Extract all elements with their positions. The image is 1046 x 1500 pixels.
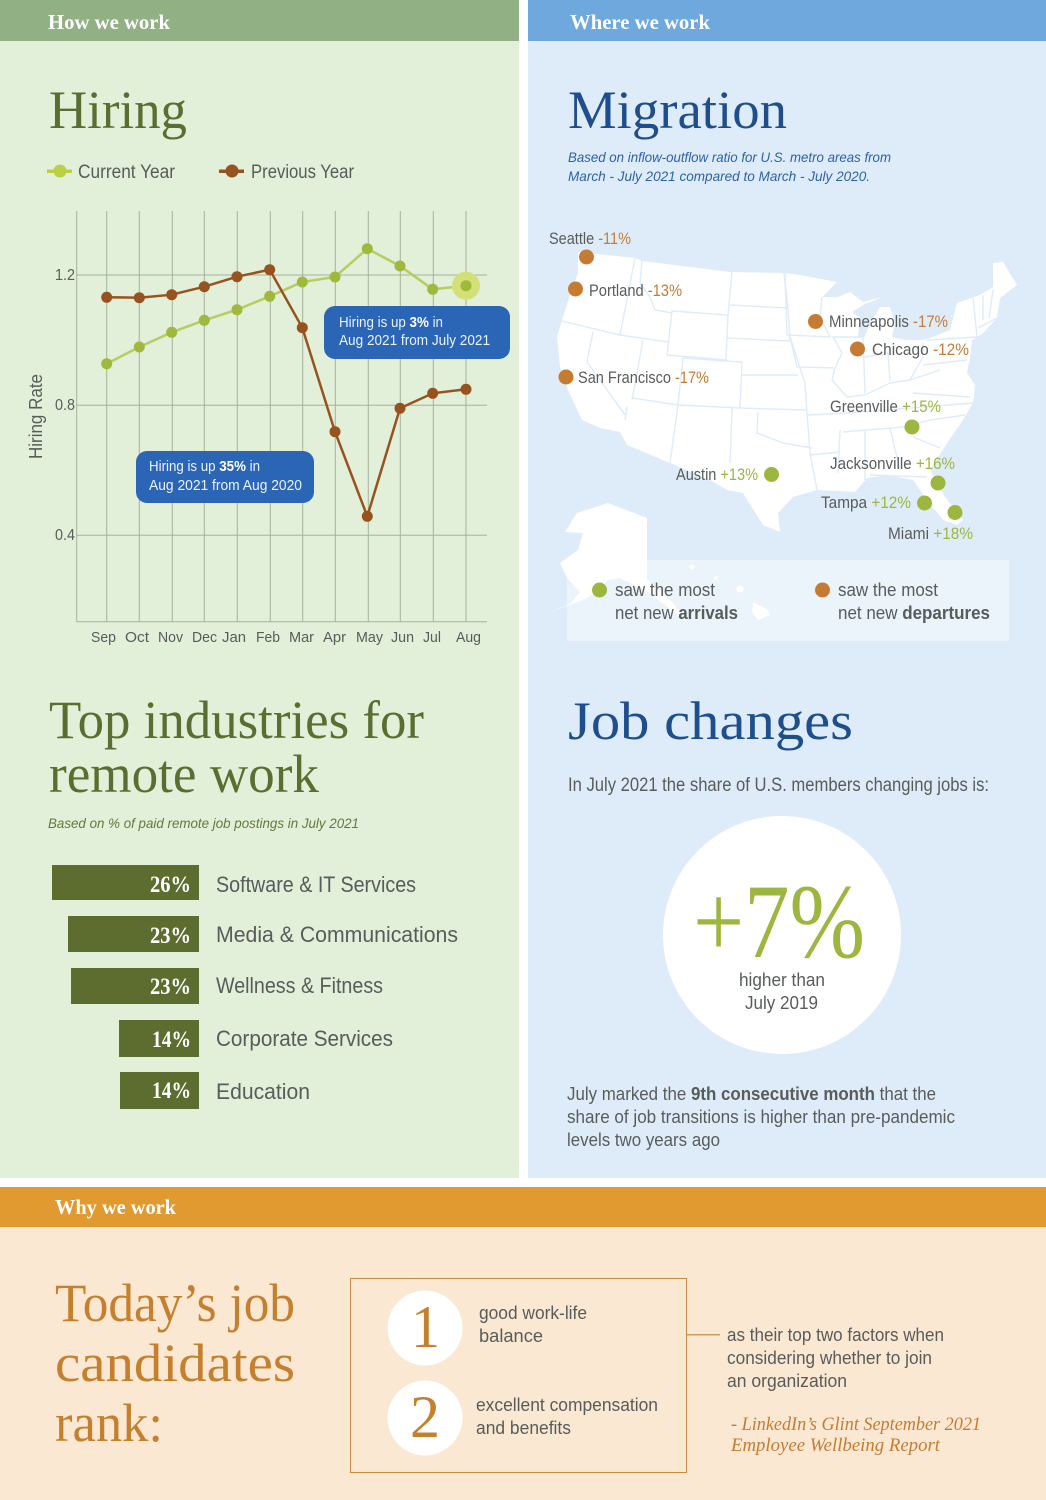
panel: how we work (0, 0, 519, 1178)
heading: Today's job candidates rank: candidates (55, 1333, 295, 1393)
city: Greenville (830, 398, 941, 434)
bar chart: industries (52, 865, 458, 1109)
migration note: March - July 2021 compared to March - July 2020. (568, 168, 870, 184)
job changes body text (567, 1083, 955, 1150)
series: current year (101, 243, 480, 369)
source citation: Employee Wellbeing Report (730, 1436, 941, 1456)
x axis labels: Jan (222, 629, 246, 646)
bar chart: industries: Wellness & Fitness (216, 973, 383, 998)
city: Seattle (549, 230, 631, 264)
bar chart: industries: 23% (150, 974, 191, 999)
rank 2: and benefits (476, 1417, 571, 1438)
bar chart: industries: Education (216, 1079, 310, 1104)
bar chart: industries: Software & IT Services (216, 872, 416, 897)
rank 1: balance (479, 1325, 543, 1346)
callout: up 35 percent: Hiring is up 35% in (149, 459, 260, 475)
bar chart: industries: Media & Communications (216, 922, 458, 947)
rank 1 (388, 1290, 587, 1366)
bar chart: industries: Corporate Services (216, 1026, 393, 1051)
callout: up 35 percent (136, 451, 314, 503)
map labels and markers (549, 230, 973, 543)
x axis labels: May (356, 629, 383, 646)
panel: why we work (0, 1187, 1046, 1500)
x axis labels (91, 629, 481, 646)
bar chart: industries: 14% (152, 1027, 191, 1052)
heading: Today's job candidates rank: Today’s job (55, 1273, 295, 1333)
heading: Top industries for remote work: Top industries for (49, 690, 424, 750)
rank 1: good work-life (479, 1302, 587, 1323)
panel: where we work (528, 0, 1046, 1178)
stat circle: +7%: July 2019 (745, 992, 818, 1013)
migration note: Based on inflow-outflow ratio for U.S. metro areas from (568, 149, 891, 165)
industries note: Based on % of paid remote job postings in July 2021 (48, 815, 359, 831)
city: Austin: Austin +13% (676, 466, 758, 484)
city: Jacksonville: Jacksonville +16% (830, 455, 955, 473)
x axis labels: Jun (391, 629, 414, 646)
city: Portland: Portland -13% (589, 282, 682, 300)
y axis labels: 0.8 (55, 397, 75, 414)
city: Tampa: Tampa +12% (821, 494, 911, 512)
y axis labels: 1.2 (55, 267, 75, 284)
city: San Francisco: San Francisco -17% (578, 369, 709, 387)
callout: up 3 percent: Hiring is up 3% in (339, 315, 443, 331)
map legend: net new arrivals (615, 603, 738, 623)
factors text: as their top two factors when (727, 1324, 944, 1345)
job changes body text: July marked the 9th consecutive month that the (567, 1083, 936, 1104)
heading: Hiring: Hiring (49, 80, 187, 140)
bar chart: industries: 14% (152, 1078, 191, 1103)
city: Miami: Miami +18% (888, 525, 973, 543)
x axis labels: Mar (289, 629, 314, 646)
y axis labels (55, 267, 75, 544)
factors text (727, 1324, 944, 1391)
source citation (730, 1415, 981, 1456)
chart legend: Previous Year (251, 162, 355, 183)
heading: Top industries for remote work (49, 690, 424, 804)
job changes intro: In July 2021 the share of U.S. members changing jobs is: (568, 775, 989, 796)
map legend: saw the most (838, 580, 938, 600)
x axis labels: Aug (456, 629, 481, 646)
header bar: how we work: How we work (48, 10, 170, 34)
city: Miami (888, 505, 973, 543)
stat circle: +7% (663, 816, 901, 1054)
bar chart: industries: 26% (150, 872, 191, 897)
x axis labels: Feb (256, 629, 280, 646)
rank 2: excellent compensation (476, 1394, 658, 1415)
map legend (567, 560, 1009, 641)
callout: up 35 percent: Aug 2021 from Aug 2020 (149, 478, 302, 494)
job changes body text: share of job transitions is higher than pre-pandemic (567, 1106, 955, 1127)
factors text: an organization (727, 1370, 847, 1391)
x axis labels: Dec (192, 629, 217, 646)
city: Chicago: Chicago -12% (872, 341, 969, 359)
rank 2: 2 (410, 1384, 440, 1450)
chart legend (47, 162, 355, 183)
header bar: where we work: Where we work (570, 10, 710, 34)
header bar: how we work (0, 0, 519, 41)
connector line (687, 1334, 720, 1336)
state borders (562, 258, 997, 490)
bar chart: industries: 23% (150, 923, 191, 948)
Hawaii (690, 564, 770, 620)
callout: up 3 percent (324, 306, 510, 359)
header bar: why we work (0, 1187, 1046, 1227)
y axis labels: 0.4 (55, 527, 75, 544)
heading: Migration: Migration (568, 80, 787, 140)
Alaska (547, 503, 687, 623)
y axis title: Hiring Rate (26, 374, 46, 459)
header bar: where we work (528, 0, 1046, 41)
x axis labels: Sep (91, 629, 116, 646)
x axis labels: Jul (423, 629, 441, 646)
city: Jacksonville (830, 455, 955, 490)
callout: up 3 percent: Aug 2021 from July 2021 (339, 333, 490, 349)
map of the United States (547, 252, 1017, 623)
x axis labels: Apr (323, 629, 346, 646)
city: Seattle: Seattle -11% (549, 230, 631, 248)
factors text: considering whether to join (727, 1347, 932, 1368)
city: Minneapolis: Minneapolis -17% (829, 313, 948, 331)
header bar: why we work: Why we work (55, 1195, 176, 1219)
x axis labels: Oct (125, 629, 150, 646)
rank 1: 1 (411, 1294, 440, 1360)
line chart: hiring rate (26, 211, 510, 646)
city: Greenville: Greenville +15% (830, 398, 941, 416)
migration note (568, 149, 891, 184)
ranking box (350, 1278, 686, 1472)
chart legend: Current Year (78, 162, 176, 183)
stat circle: +7%: higher than (739, 969, 825, 990)
heading: Today's job candidates rank: rank: (55, 1393, 163, 1453)
heading: Top industries for remote work: remote work (49, 744, 319, 804)
map legend: saw the most (615, 580, 715, 600)
x axis labels: Nov (158, 629, 183, 646)
job changes body text: levels two years ago (567, 1129, 720, 1150)
heading: Job changes: Job changes (568, 691, 853, 751)
stat circle: +7%: +7% (693, 863, 865, 980)
heading: Today's job candidates rank (55, 1273, 295, 1453)
source citation: - LinkedIn’s Glint September 2021 (731, 1415, 981, 1435)
series: previous year (101, 264, 471, 522)
rank 2 (388, 1380, 658, 1456)
map legend: net new departures (838, 603, 990, 623)
